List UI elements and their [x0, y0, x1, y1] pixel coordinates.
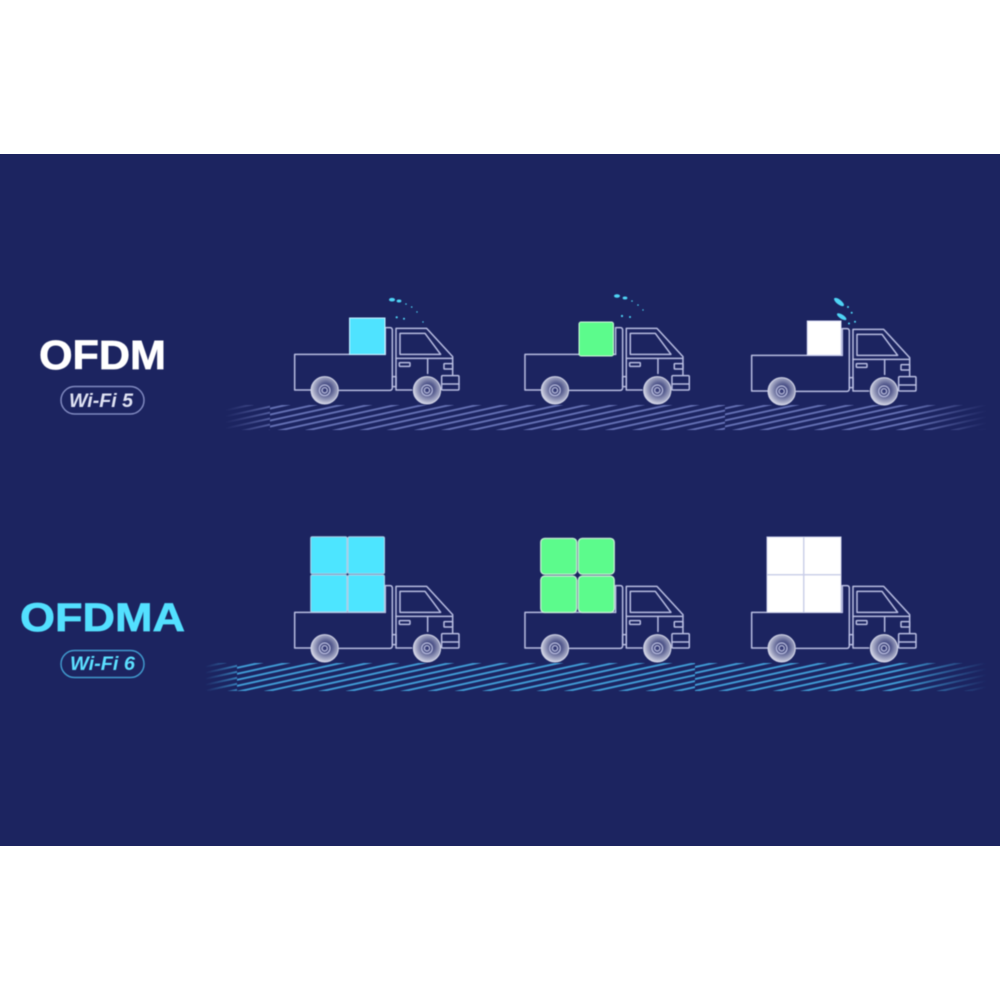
badge: Wi-Fi 5: Wi-Fi 5	[69, 390, 134, 412]
truck: OFDM cyan, single packet	[295, 318, 459, 404]
splash: cyan droplets on second truck	[614, 294, 644, 318]
splash: cyan droplets on third truck	[833, 296, 856, 324]
heading: OFDM: OFDM	[39, 332, 166, 378]
heading: OFDMA: OFDMA	[20, 596, 185, 640]
truck: OFDMA green, four packets	[525, 538, 689, 662]
truck: OFDMA cyan, four packets	[295, 537, 459, 662]
packets: cyan stack	[311, 537, 384, 612]
splash: cyan droplets on first truck	[389, 298, 424, 323]
panel: dark navy background	[0, 154, 1000, 846]
road: bottom row stripes	[205, 663, 987, 691]
packet: cyan	[350, 318, 385, 354]
packets: green stack	[541, 538, 614, 612]
packet: white	[807, 321, 841, 355]
badge: Wi-Fi 6: Wi-Fi 6	[70, 653, 135, 675]
truck: OFDM white, single packet	[752, 321, 916, 405]
badge: Wi-Fi 5	[61, 386, 144, 414]
packet: green	[579, 322, 614, 356]
packets: white stack	[767, 537, 841, 612]
road: top row stripes	[225, 405, 987, 430]
truck: OFDM green, single packet	[525, 322, 689, 404]
badge: Wi-Fi 6	[61, 650, 144, 678]
truck: OFDMA white, four packets	[752, 537, 916, 662]
